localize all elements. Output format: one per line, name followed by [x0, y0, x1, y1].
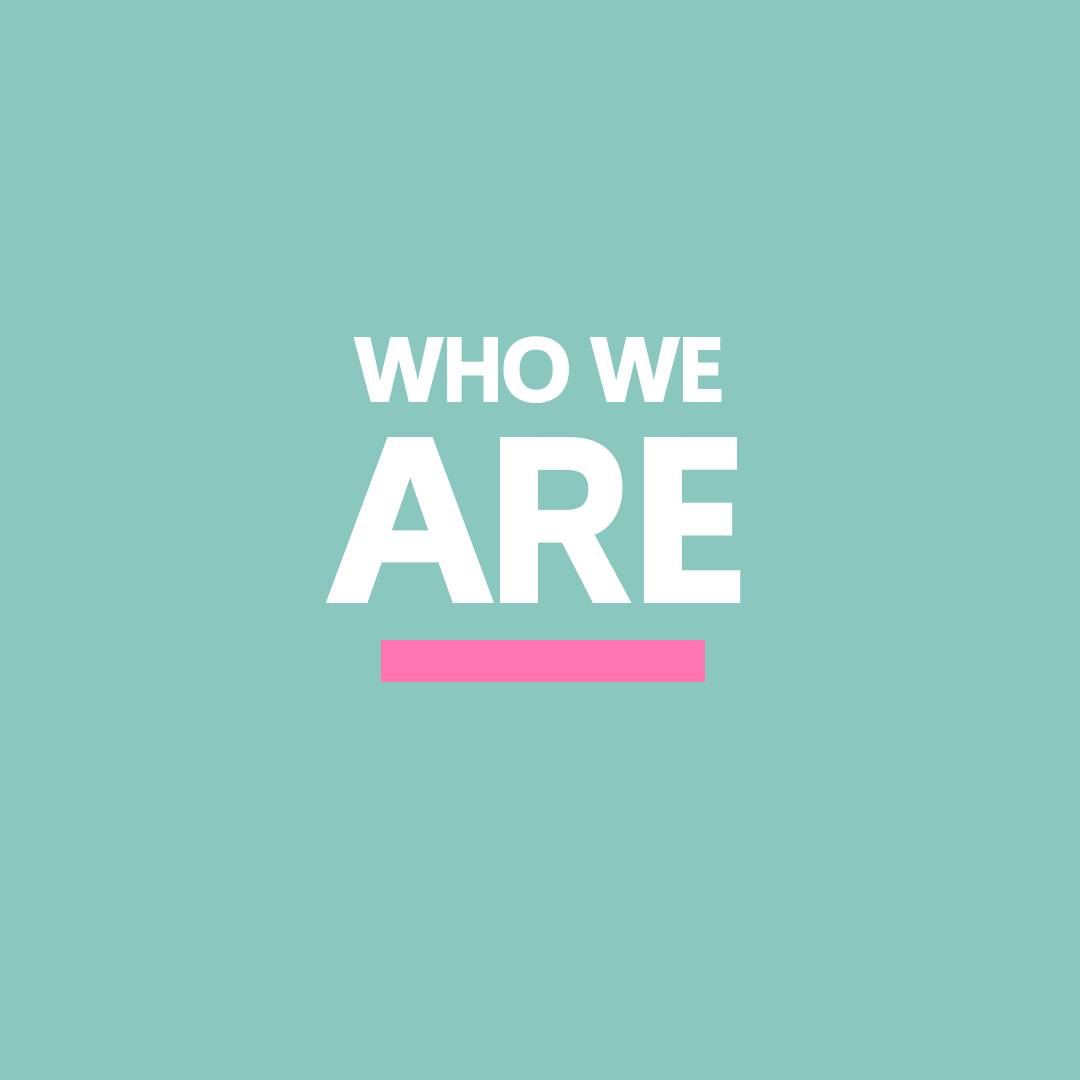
heading line: WHO WE: H: [443, 320, 502, 420]
heading line: WHO WE: W: [592, 320, 678, 420]
heading line: ARE: [325, 391, 744, 649]
heading line: WHO WE: O: [501, 320, 571, 420]
heading line: ARE: R: [490, 392, 630, 649]
heading line: WHO WE: W: [356, 320, 442, 420]
heading line: ARE: E: [636, 391, 744, 649]
pink accent bar: [381, 640, 705, 682]
heading line: WHO WE: [356, 319, 723, 420]
heading line: ARE: A: [325, 392, 495, 649]
heading line: WHO WE: E: [680, 319, 723, 420]
